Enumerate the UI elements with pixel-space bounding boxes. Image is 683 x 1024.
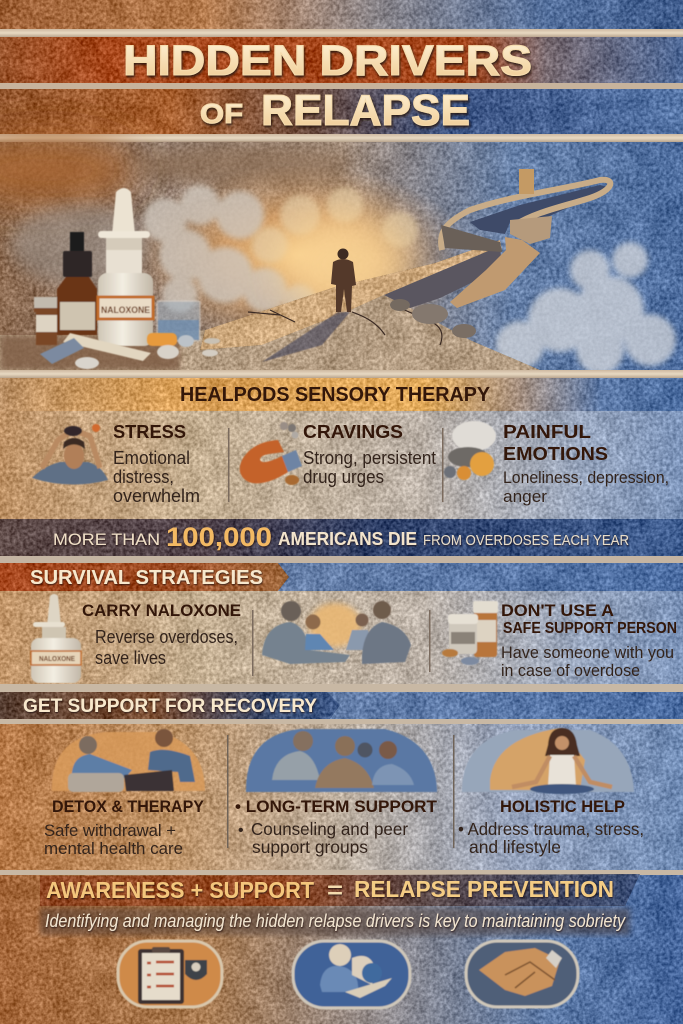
heading ribbon <box>0 563 289 591</box>
icon: family embrace <box>262 601 411 664</box>
warm sky and clouds <box>0 134 676 374</box>
stress text: distress, <box>113 467 174 487</box>
number: 100,000: 100,000 <box>166 522 272 552</box>
icon: medicine bottles: NALOXONE <box>101 305 150 316</box>
holistic help text: • Address trauma, stress, <box>458 819 644 839</box>
cravings text: drug urges <box>303 467 384 487</box>
don't use alone text <box>501 601 677 680</box>
icon: pills and packets <box>40 333 220 369</box>
heading: HEALPODS SENSORY THERAPY <box>180 384 491 406</box>
long-term support text: support groups <box>252 837 368 857</box>
carry naloxone text: CARRY NALOXONE <box>82 601 241 620</box>
don't use alone text: Have someone with you <box>501 644 674 662</box>
top banner: title <box>0 0 683 142</box>
scene: therapy session <box>52 729 205 792</box>
statistic banner: overdose deaths: MORE THAN <box>53 530 160 549</box>
holistic help text <box>458 797 644 857</box>
icon: stressed man <box>32 424 108 485</box>
carry naloxone text: Reverse overdoses, <box>95 627 238 647</box>
cravings text: CRAVINGS <box>303 422 403 442</box>
title line 1: HIDDEN DRIVERS <box>123 37 532 85</box>
heading ribbon <box>0 692 340 719</box>
detox text: DETOX & THERAPY <box>52 797 205 816</box>
scene: meditation <box>462 728 634 794</box>
painful emotions text: anger <box>503 487 547 506</box>
panel: survival strategies <box>0 563 683 684</box>
panel: closing message <box>0 874 683 1024</box>
painful emotions text <box>503 422 669 506</box>
icon: people embracing <box>293 941 410 1008</box>
icon: magnet <box>240 422 302 485</box>
detox text: Safe withdrawal + <box>44 821 176 840</box>
hero illustration: path through clouds with naloxone <box>0 134 683 374</box>
stress text: STRESS <box>113 422 186 442</box>
icon: naloxone spray: NALOXONE <box>39 656 75 663</box>
supporting sentence <box>40 908 630 935</box>
icon: pill bottles <box>442 601 498 665</box>
formula banner: AWARENESS + SUPPORT <box>46 877 314 903</box>
long-term support text: • LONG-TERM SUPPORT <box>235 797 438 816</box>
icon: clipboard checklist <box>118 941 222 1007</box>
title word: of: OF <box>200 98 243 129</box>
scene: support group <box>246 729 437 792</box>
painful emotions text: PAINFUL <box>503 422 591 442</box>
carry naloxone text: save lives <box>95 648 166 668</box>
formula banner: RELAPSE PREVENTION <box>354 876 614 902</box>
holistic help text: HOLISTIC HELP <box>500 797 625 816</box>
statistic banner: overdose deaths: FROM OVERDOSES EACH YEAR <box>423 532 629 549</box>
statistic banner: overdose deaths: AMERICANS DIE <box>278 529 417 549</box>
detox text: mental health care <box>44 839 183 858</box>
title word: relapse: RELAPSE <box>261 86 470 135</box>
icon: handshake <box>466 941 578 1007</box>
long-term support text: • <box>238 822 244 839</box>
stress text: overwhelm <box>113 486 200 506</box>
statistic banner: overdose deaths <box>0 519 683 556</box>
don't use alone text: DON'T USE A <box>501 601 614 620</box>
formula banner: = <box>327 877 343 903</box>
cracked road and wall <box>200 169 612 350</box>
panel: get support for recovery: GET SUPPORT FOR RECOVERY <box>23 696 317 717</box>
stress text: Emotional <box>113 448 190 468</box>
figure and shadow <box>262 248 356 362</box>
icon: heavy rocks <box>444 421 496 480</box>
supporting sentence: Identifying and managing the hidden relapse drivers is key to maintaining sobriety <box>45 911 626 931</box>
painful emotions text: Loneliness, depression, <box>503 468 669 487</box>
detox text <box>44 797 205 858</box>
panel: survival strategies: SURVIVAL STRATEGIES <box>30 567 263 589</box>
cravings text: Strong, persistent <box>303 448 436 468</box>
icon: medicine bottles <box>34 188 200 346</box>
don't use alone text: in case of overdose <box>501 662 640 680</box>
cravings text <box>303 422 436 487</box>
formula banner <box>40 874 640 906</box>
icon: naloxone spray <box>31 594 81 683</box>
panel: get support for recovery <box>0 692 683 870</box>
stress text <box>113 422 200 506</box>
ground <box>0 293 540 370</box>
long-term support text: Counseling and peer <box>251 819 408 839</box>
carry naloxone text <box>82 601 241 668</box>
panel: Healpods sensory therapy <box>0 378 683 519</box>
painful emotions text: EMOTIONS <box>503 444 608 464</box>
long-term support text <box>235 797 438 857</box>
holistic help text: and lifestyle <box>469 837 561 857</box>
